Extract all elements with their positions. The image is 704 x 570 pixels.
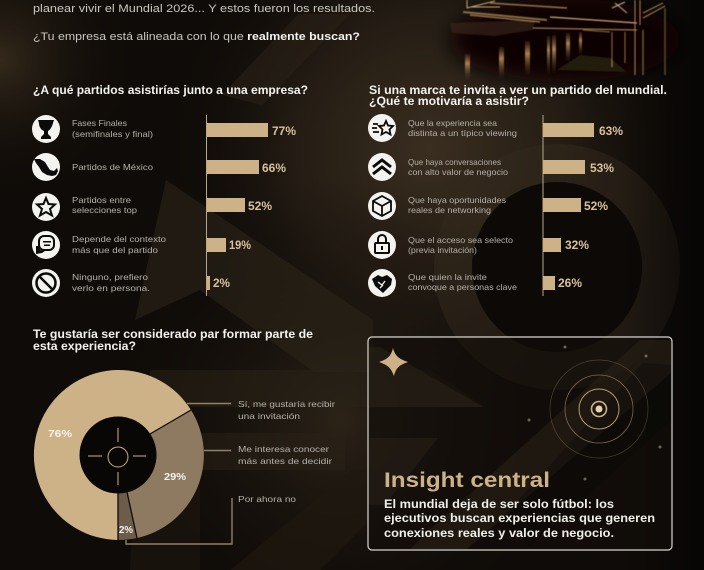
donut chart: 29% (164, 471, 187, 483)
bar chart: left (206, 115, 296, 296)
labels: left chart: Ninguno, prefiero (72, 272, 148, 282)
labels: right chart: con alto valor de negocio (408, 167, 508, 177)
leader lines (126, 404, 232, 544)
labels: right chart: Que quien la invite (408, 272, 487, 282)
labels: right chart: convoque a personas clave (408, 282, 517, 292)
icon: star (32, 193, 60, 221)
insight text: conexiones reales y valor de negocio. (384, 528, 614, 540)
labels: donut chart: Me interesa conocer (238, 444, 329, 454)
heading: left chart: ¿A qué partidos asistirías junto a una empresa? (33, 85, 308, 97)
donut chart: 76% (48, 428, 73, 440)
labels: donut chart: Sí, me gustaría recibir (238, 399, 335, 409)
bar chart: right (543, 115, 623, 296)
icon: four-point star (379, 348, 408, 376)
bar chart: left: 52% (248, 199, 272, 213)
icon: double chevron (368, 153, 396, 181)
heading: donut chart: Te gustaría ser considerado par formar parte de (33, 329, 313, 341)
labels: left chart (72, 118, 166, 293)
labels: right chart: Que la experiencia sea (408, 118, 497, 128)
labels: donut chart: una invitación (238, 411, 300, 421)
heading: right chart: ¿Qué te motivaría a asistir? (369, 96, 529, 108)
labels: left chart: (semifinales y final) (72, 129, 153, 139)
labels: left chart: más que del partido (72, 245, 158, 255)
intro text (33, 3, 375, 43)
insight text: El mundial deja de ser solo fútbol: los (384, 499, 614, 511)
bar chart: right: 53% (590, 161, 614, 175)
labels: right chart: Que el acceso sea selecto (408, 235, 513, 245)
labels: right chart: Que haya conversaciones (408, 157, 501, 167)
labels: right chart: distinta a un típico viewing (408, 128, 517, 138)
icon: prohibited (32, 269, 60, 297)
labels: donut chart: Por ahora no (238, 494, 296, 504)
bar chart: left: 77% (272, 124, 296, 138)
icon: chat bubbles (32, 231, 60, 259)
labels: right chart: (previa invitación) (408, 245, 477, 255)
labels: left chart: verlo en persona. (72, 283, 150, 293)
labels: left chart: Partidos de México (72, 162, 153, 172)
labels: right chart: Que haya oportunidades (408, 195, 506, 205)
labels: right chart (408, 118, 517, 292)
labels: left chart: Fases Finales (72, 118, 127, 128)
bar chart: right: 26% (558, 276, 582, 290)
stadium illustration (450, 0, 665, 81)
heading: donut chart (33, 329, 313, 353)
bar chart: left: 2% (213, 276, 230, 290)
labels: donut chart: más antes de decidir (238, 456, 332, 466)
insight text: ejecutivos buscan experiencias que generen (384, 513, 655, 525)
labels: left chart: Partidos entre (72, 195, 131, 205)
insight text (384, 499, 655, 540)
labels: left chart: selecciones top (72, 205, 137, 215)
icon: Mexico map (32, 153, 60, 181)
donut chart (34, 370, 204, 540)
labels: right chart: reales de networking (408, 205, 491, 215)
bar chart: right: 52% (584, 199, 608, 213)
bar chart: left: 66% (262, 161, 286, 175)
bar chart: right: 63% (599, 124, 623, 138)
intro text: planear vivir el Mundial 2026... Y estos fueron los resultados. (33, 3, 375, 15)
icon: cube (368, 192, 396, 220)
insight title: Insight central (384, 469, 550, 492)
intro text: ¿Tu empresa está alineada con lo que realmente buscan? (33, 31, 360, 43)
heading: right chart (369, 85, 667, 108)
panel: insight central (368, 337, 672, 550)
icon: star with speed lines (368, 114, 396, 142)
bar chart: left: 19% (229, 238, 251, 252)
labels: left chart: Depende del contexto (72, 234, 166, 244)
icon: handshake shield (368, 269, 396, 297)
icon: padlock (368, 231, 396, 259)
labels: donut chart (238, 399, 335, 504)
donut chart: 2% (119, 524, 134, 536)
concentric rings (550, 360, 648, 458)
bar chart: right: 32% (565, 238, 589, 252)
icon: trophy (32, 115, 60, 143)
heading: donut chart: esta experiencia? (33, 341, 136, 353)
particles (528, 346, 662, 480)
heading: right chart: Si una marca te invita a ver un partido del mundial. (369, 85, 667, 97)
